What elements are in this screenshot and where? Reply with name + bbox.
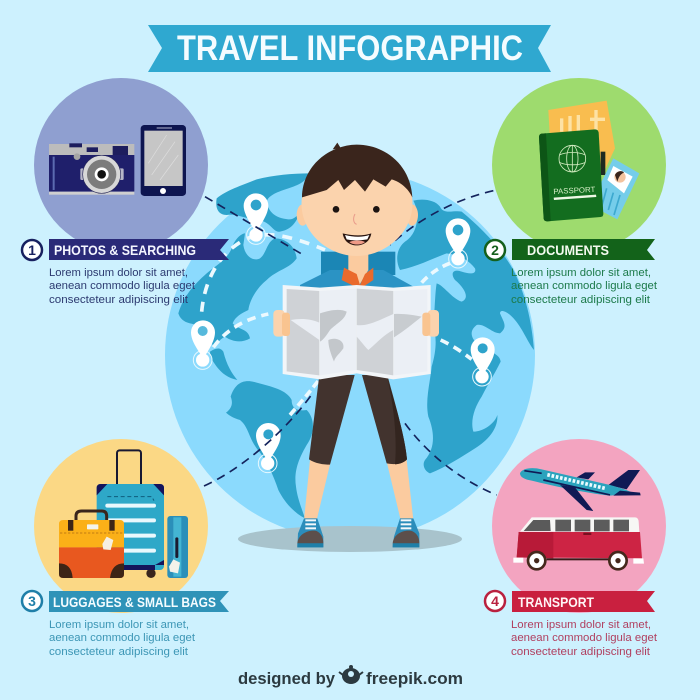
icon: small bag bbox=[167, 516, 188, 578]
icon: camera bbox=[49, 143, 134, 195]
label 2: documents bbox=[485, 239, 657, 306]
body text 2: Lorem ipsum dolor sit amet, bbox=[511, 267, 651, 279]
ground shadow bbox=[238, 526, 462, 552]
number badge 1: 1 bbox=[28, 242, 36, 258]
hair bbox=[302, 143, 412, 197]
pin 2 bbox=[446, 218, 470, 268]
body text 4: consecteteur adipiscing elit bbox=[511, 646, 650, 658]
panel circle: luggage bbox=[34, 439, 208, 613]
map land north america bbox=[320, 310, 347, 342]
map land south america bbox=[328, 339, 344, 362]
world globe with routes and pins bbox=[165, 170, 535, 540]
white route: north west bbox=[202, 235, 325, 312]
title ribbon bbox=[148, 25, 551, 72]
heading 4: TRANSPORT bbox=[518, 594, 594, 610]
continent: south america bbox=[226, 381, 313, 518]
heading 2: DOCUMENTS bbox=[527, 242, 609, 258]
icon: red bus bbox=[513, 517, 644, 571]
ribbon 2 bbox=[512, 239, 655, 260]
body text 1: aenean commodo ligula eget bbox=[49, 280, 195, 292]
continent: north america bbox=[178, 233, 297, 347]
pin 4 bbox=[471, 337, 495, 386]
ribbon 1 bbox=[49, 239, 229, 260]
backpack straps bbox=[321, 252, 395, 275]
continent: eurasia and africa bbox=[397, 200, 534, 473]
continent: central america bbox=[210, 349, 237, 380]
label 3: luggages and small bags bbox=[22, 591, 229, 658]
dashed connector: transport bbox=[405, 423, 497, 495]
icon: id card bbox=[601, 158, 639, 219]
heading 1: PHOTOS & SEARCHING bbox=[54, 242, 196, 258]
body text 4 bbox=[511, 619, 657, 658]
body text 1: Lorem ipsum dolor sit amet, bbox=[49, 267, 188, 279]
map land west bbox=[291, 319, 319, 340]
body text 2: aenean commodo ligula eget bbox=[511, 280, 657, 292]
dashed connector: documents bbox=[390, 191, 493, 245]
jacket bbox=[300, 270, 413, 293]
title: TRAVEL INFOGRAPHIC bbox=[177, 29, 523, 68]
body text 3: Lorem ipsum dolor sit amet, bbox=[49, 619, 189, 631]
white route: north east bbox=[422, 263, 452, 283]
number badge 4: 4 bbox=[491, 593, 499, 609]
body text 1 bbox=[49, 267, 195, 306]
map land asia bbox=[394, 314, 422, 337]
map land europe bbox=[357, 314, 393, 350]
legs bbox=[304, 460, 413, 520]
right shoe bbox=[393, 518, 419, 547]
body text 3: consecteteur adipiscing elit bbox=[49, 646, 188, 658]
face bbox=[302, 172, 412, 256]
ribbon 4 bbox=[512, 591, 655, 612]
panel circle: documents bbox=[492, 78, 666, 252]
number badge 4 bbox=[485, 591, 505, 611]
footer credit bbox=[238, 665, 463, 688]
dashed connector: photos bbox=[205, 197, 303, 255]
ears bbox=[297, 204, 418, 226]
traveller character bbox=[273, 143, 439, 547]
body text 4: aenean commodo ligula eget bbox=[511, 632, 657, 644]
panel circle: photos bbox=[34, 78, 208, 252]
nose bbox=[354, 214, 357, 224]
white route: west bbox=[213, 314, 268, 347]
label 4: transport bbox=[485, 591, 657, 658]
icon: tickets bbox=[548, 101, 615, 175]
number badge 2 bbox=[485, 240, 505, 260]
body text 4: Lorem ipsum dolor sit amet, bbox=[511, 619, 651, 631]
pin 3 bbox=[191, 320, 215, 369]
left hand bbox=[273, 310, 290, 337]
icon: passport bbox=[539, 129, 603, 221]
white route: south bbox=[290, 381, 318, 415]
icon: passport: PASSPORT bbox=[553, 185, 596, 196]
mouth bbox=[343, 233, 371, 245]
icon: large suitcase bbox=[97, 450, 164, 578]
shorts bbox=[309, 375, 407, 465]
number badge 3: 3 bbox=[28, 593, 36, 609]
number badge 1 bbox=[22, 240, 42, 260]
label 1: photos and searching bbox=[22, 239, 229, 306]
icon: freepik logo bbox=[339, 665, 363, 684]
ribbon 3 bbox=[49, 591, 229, 612]
number badge 3 bbox=[22, 591, 42, 611]
continent: arctic bbox=[216, 173, 308, 232]
pin 1 bbox=[244, 193, 268, 244]
eyes bbox=[333, 206, 380, 213]
body text 2 bbox=[511, 267, 657, 306]
footer credit: designed by bbox=[238, 670, 336, 688]
white route: east bbox=[441, 340, 472, 359]
body text 2: consecteteur adipiscing elit bbox=[511, 294, 650, 306]
left shoe bbox=[297, 518, 323, 547]
panel circle: transport bbox=[492, 439, 666, 613]
body text 1: consecteteur adipiscing elit bbox=[49, 294, 188, 306]
footer credit: freepik.com bbox=[366, 670, 463, 688]
icon: smartphone bbox=[141, 125, 186, 196]
neck bbox=[348, 250, 368, 285]
heading 3: LUGGAGES & SMALL BAGS bbox=[53, 594, 216, 610]
orange collar bbox=[342, 268, 373, 287]
open map bbox=[283, 285, 431, 379]
body text 3: aenean commodo ligula eget bbox=[49, 632, 195, 644]
pin 5 bbox=[256, 423, 281, 473]
right hand bbox=[422, 310, 439, 337]
body text 3 bbox=[49, 619, 195, 658]
icon: airplane bbox=[520, 468, 641, 511]
number badge 2: 2 bbox=[491, 242, 499, 258]
icon: orange travel bag bbox=[59, 511, 124, 578]
dashed connector: luggage bbox=[204, 396, 311, 486]
